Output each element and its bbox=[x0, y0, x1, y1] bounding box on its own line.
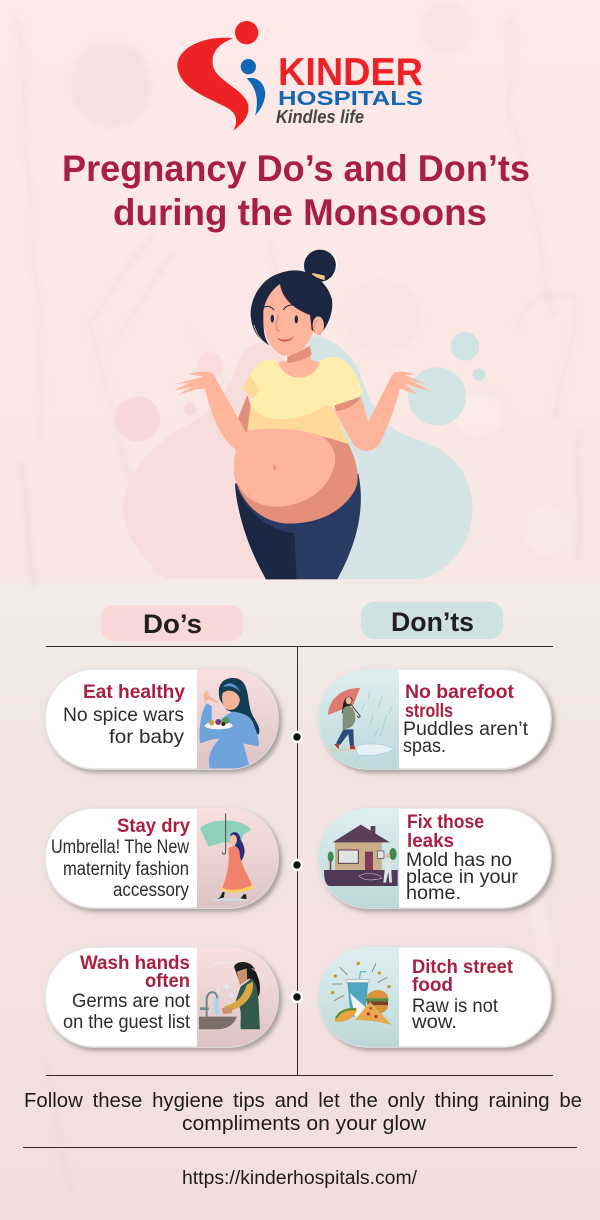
image: street food bbox=[319, 947, 399, 1047]
image: woman with umbrella bbox=[197, 808, 279, 908]
text: Ditch street food bbox=[411, 957, 514, 1033]
card: Wash hands often bbox=[45, 947, 279, 1047]
image: woman washing hands bbox=[197, 947, 279, 1047]
decorative circles bbox=[115, 332, 485, 442]
jeans bbox=[235, 473, 361, 579]
logo: Kinder Hospitals bbox=[177, 21, 423, 131]
card: No barefoot strolls bbox=[319, 669, 551, 769]
shirt bbox=[243, 357, 363, 444]
card: Eat healthy bbox=[45, 669, 279, 769]
sleeve shadow bbox=[334, 397, 361, 411]
text: No barefoot strolls: Puddles aren’t bbox=[403, 719, 529, 740]
text: Eat healthy: Eat healthy bbox=[83, 682, 185, 703]
back arm shadow bbox=[237, 395, 257, 435]
text: Stay dry bbox=[51, 816, 190, 901]
text: No barefoot strolls: strolls bbox=[405, 701, 453, 722]
text: Eat healthy bbox=[63, 682, 185, 748]
text: Fix those leaks: leaks bbox=[407, 831, 454, 852]
card: Fix those leaks bbox=[319, 808, 551, 908]
timeline dividers bbox=[46, 646, 553, 1076]
text: Wash hands often: Germs are not bbox=[72, 991, 191, 1012]
heading: Don'ts: Don’ts bbox=[391, 607, 474, 637]
text: Ditch street food: food bbox=[412, 975, 453, 996]
text: Ditch street food: Raw is not bbox=[412, 996, 499, 1017]
text: Wash hands often: on the guest list bbox=[63, 1012, 191, 1033]
text: Fix those leaks bbox=[406, 812, 519, 904]
illustration: pregnant woman shrugging bbox=[115, 250, 485, 579]
text: Fix those leaks: place in your bbox=[406, 867, 519, 888]
text: No barefoot strolls: spas. bbox=[403, 736, 446, 757]
arms and hands bbox=[173, 372, 432, 451]
image: woman eating bbox=[197, 669, 279, 769]
text: Stay dry: maternity fashion bbox=[63, 859, 189, 880]
text: Fix those leaks: Mold has no bbox=[406, 850, 512, 871]
closing message bbox=[24, 1090, 582, 1135]
card: Stay dry bbox=[45, 808, 279, 908]
title: Pregnancy Do’s and Don’ts bbox=[62, 148, 530, 189]
text: HOSPITALS: HOSPITALS bbox=[278, 87, 423, 110]
text: Eat healthy: No spice wars bbox=[63, 705, 184, 726]
heading: Do's: Do’s bbox=[143, 609, 202, 639]
timeline dots bbox=[292, 732, 302, 1002]
neck bbox=[278, 345, 320, 377]
heading: Do's bbox=[101, 605, 243, 641]
text: Fix those leaks: Fix those bbox=[407, 812, 484, 833]
icon: logo figures bbox=[177, 21, 265, 131]
text: Wash hands often: Wash hands bbox=[80, 953, 190, 974]
card: Ditch street food bbox=[319, 947, 551, 1047]
background blob: pink bbox=[123, 343, 297, 579]
head bbox=[251, 250, 336, 356]
belly bbox=[234, 429, 358, 524]
text: Stay dry: Umbrella! The New bbox=[51, 837, 189, 858]
text: Ditch street food: wow. bbox=[411, 1012, 457, 1033]
title bbox=[62, 148, 530, 233]
text: No barefoot strolls: No barefoot bbox=[405, 682, 515, 703]
text: Wash hands often bbox=[63, 953, 191, 1033]
heading: Don'ts bbox=[361, 602, 503, 639]
image: woman in the rain bbox=[319, 669, 399, 769]
text: KINDER: KINDER bbox=[278, 51, 423, 94]
title: during the Monsoons bbox=[113, 192, 487, 233]
text: Stay dry: accessory bbox=[113, 880, 189, 901]
text: No barefoot strolls bbox=[403, 682, 529, 757]
text: Ditch street food: Ditch street bbox=[412, 957, 514, 978]
background blob: teal bbox=[287, 336, 473, 579]
text: Stay dry: Stay dry bbox=[117, 816, 190, 837]
website link: https://kinderhospitals.com/ bbox=[182, 1168, 418, 1189]
text: Fix those leaks: home. bbox=[406, 883, 461, 904]
closing message: compliments on your glow bbox=[182, 1113, 427, 1135]
text: Eat healthy: for baby bbox=[109, 727, 185, 748]
text: Wash hands often: often bbox=[145, 971, 190, 992]
closing message: Follow these hygiene tips and let the only thing raining be bbox=[24, 1090, 582, 1112]
image: leaking house bbox=[319, 808, 399, 908]
text: tagline: Kindles life bbox=[276, 107, 364, 127]
